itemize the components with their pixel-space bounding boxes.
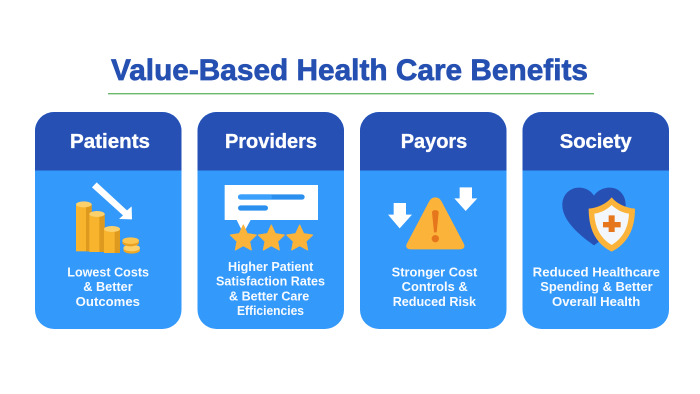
heading: society: Society bbox=[560, 130, 632, 153]
text: society benefit bbox=[533, 264, 660, 309]
text: providers benefit: & Better Care bbox=[229, 288, 309, 304]
text: providers benefit: Efficiencies bbox=[237, 303, 304, 318]
text: society benefit: Reduced Healthcare bbox=[533, 264, 660, 280]
icon: heart and medical shield bbox=[562, 188, 635, 252]
title underline bbox=[108, 93, 594, 94]
text: society benefit: Spending & Better bbox=[540, 279, 653, 294]
text: providers benefit: Higher Patient bbox=[228, 259, 314, 274]
card background: payors bbox=[360, 112, 507, 329]
heading: providers: Providers bbox=[225, 130, 317, 153]
text: patients benefit: Lowest Costs bbox=[67, 264, 149, 280]
text: payors benefit: Stronger Cost bbox=[392, 264, 478, 280]
text: patients benefit bbox=[67, 264, 149, 309]
card background: providers bbox=[197, 112, 345, 329]
card background: patients bbox=[35, 112, 182, 329]
heading: patients: Patients bbox=[70, 130, 150, 153]
panel: payors bbox=[360, 112, 507, 329]
text: providers benefit bbox=[216, 259, 325, 318]
icon: review bubble with three stars bbox=[225, 185, 318, 250]
text: patients benefit: Outcomes bbox=[76, 294, 140, 309]
icon: warning triangle with down arrows bbox=[388, 187, 477, 249]
panel: providers bbox=[197, 112, 345, 329]
infographic canvas bbox=[35, 58, 669, 329]
text: patients benefit: & Better bbox=[83, 279, 133, 294]
text: providers benefit: Satisfaction Rates bbox=[216, 274, 325, 289]
title: Value-Based Health Care Benefits bbox=[111, 54, 588, 87]
icon: coins with down arrow bbox=[76, 182, 140, 254]
text: payors benefit: Reduced Risk bbox=[393, 294, 477, 309]
heading: payors: Payors bbox=[401, 130, 467, 153]
panel: society bbox=[522, 112, 670, 329]
panel: patients bbox=[35, 112, 182, 329]
text: society benefit: Overall Health bbox=[552, 294, 640, 309]
text: payors benefit bbox=[392, 264, 478, 309]
text: payors benefit: Controls & bbox=[402, 279, 468, 294]
card background: society bbox=[522, 112, 670, 329]
